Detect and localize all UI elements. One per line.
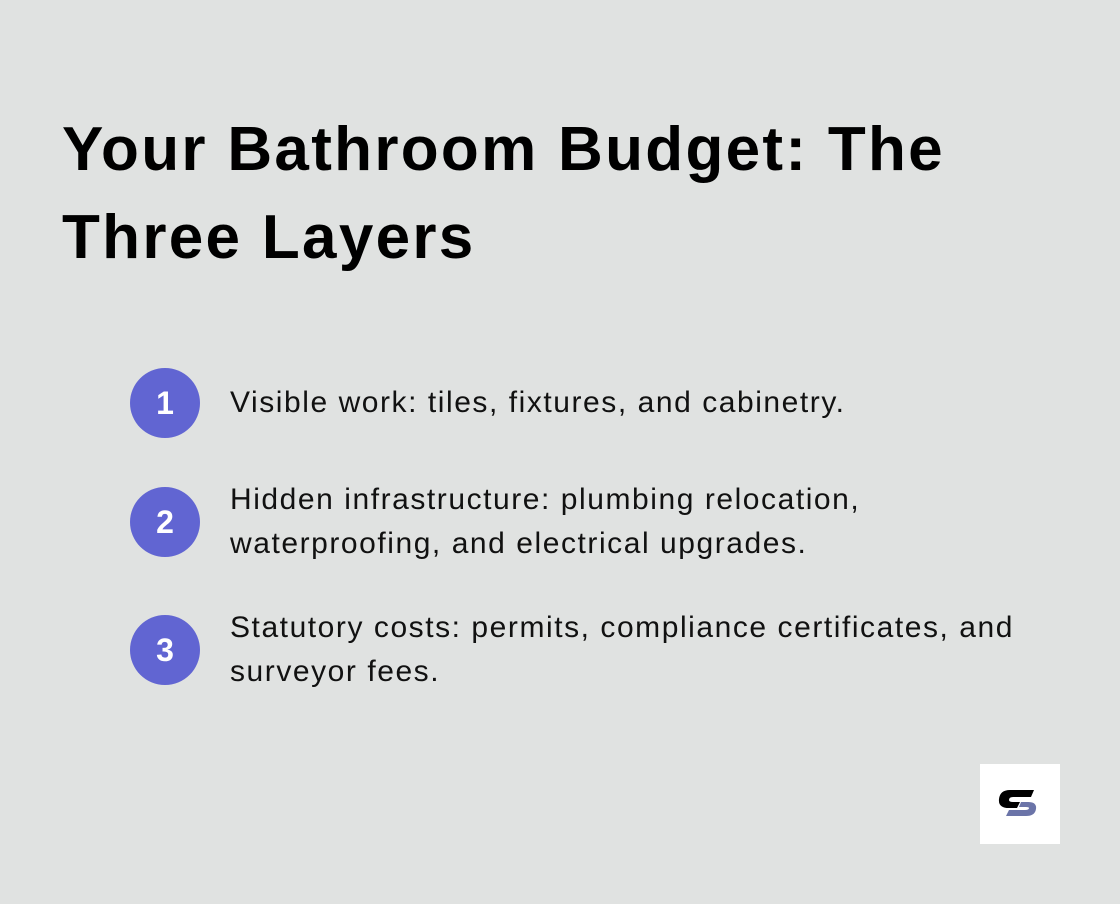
badge 1	[130, 368, 200, 438]
title: Three Layers	[62, 203, 476, 272]
text 3: surveyor fees.	[230, 655, 440, 688]
title	[62, 115, 945, 272]
badge 2: 2	[156, 504, 174, 540]
badge 2	[130, 487, 200, 557]
item 2	[130, 483, 860, 560]
badge 3	[130, 615, 200, 685]
item 3	[130, 611, 1014, 688]
logo	[980, 764, 1060, 844]
text 2	[230, 483, 860, 560]
text 3: Statutory costs: permits, compliance certificates, and	[230, 611, 1014, 644]
text 2: waterproofing, and electrical upgrades.	[230, 527, 807, 560]
badge 3: 3	[156, 632, 174, 668]
text 1: Visible work: tiles, fixtures, and cabinetry.	[230, 386, 846, 419]
title: Your Bathroom Budget: The	[62, 115, 945, 184]
item 1	[130, 368, 846, 438]
badge 1: 1	[156, 385, 174, 421]
text 3	[230, 611, 1014, 688]
text 2: Hidden infrastructure: plumbing relocation,	[230, 483, 860, 516]
